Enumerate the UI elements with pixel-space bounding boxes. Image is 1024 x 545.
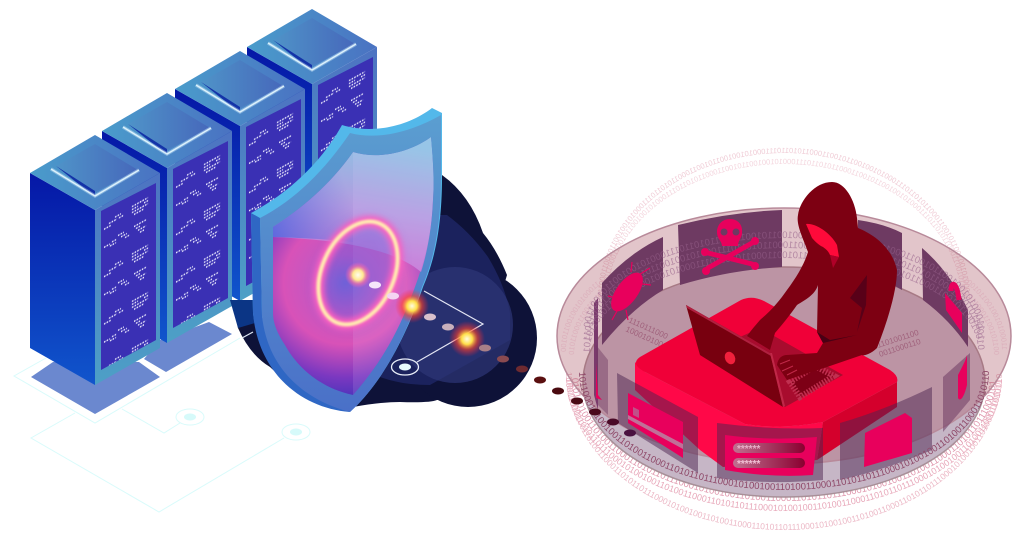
- attack trail glowing points: [345, 262, 485, 357]
- lower disc: [583, 267, 985, 497]
- network node: [392, 359, 418, 375]
- data panel: front right, documents: [840, 387, 932, 480]
- hacker fingers: [780, 360, 797, 375]
- hacker figure: [747, 182, 897, 380]
- server floor tiles: [31, 322, 232, 414]
- network lines: [417, 291, 483, 362]
- glowing ring: [303, 209, 413, 337]
- icon: bug: [606, 262, 651, 320]
- icon: padlock: [945, 284, 962, 333]
- server rack 2: [102, 93, 232, 343]
- hacker body shadow: [850, 275, 867, 332]
- server rack 4: [247, 9, 377, 259]
- data panel: front left, card: [617, 373, 698, 473]
- dark network cloud behind shield: [230, 175, 537, 407]
- binary rings below the disc: 11000101001001101001100011010110111000101001001101001100011010110111000101001001101001100011010110111000101001001101001100011010110111000101: [566, 372, 1002, 530]
- binary printed on disc floor: 1110111000: [627, 316, 670, 341]
- laptop base and keyboard: [700, 328, 843, 407]
- circuit lines on floor: [14, 338, 310, 512]
- binary on disc sides: 001101001100011010110: [954, 281, 999, 354]
- binary printed on disc floor: 0011000110: [878, 337, 922, 359]
- data panel: far right: [943, 353, 970, 432]
- server rack 3: [175, 51, 305, 301]
- icon: login form: [725, 435, 817, 476]
- binary ring top (back): 100110100110001101011011100010100100110100110001101011011100010100100110100110001101011011100010100100110100110001101011: [604, 158, 966, 298]
- laptop screen: [686, 305, 785, 407]
- icon: skull and crossbones: [701, 219, 759, 275]
- binary rings below the disc: 1001100011010110111000101001001101001100011010110111000101001001101001100011010110111000101001001101001100011010110111000101: [566, 378, 1002, 512]
- upper translucent disc: [557, 208, 1011, 464]
- binary ring top (back): 110001010010011010011000110101101110001010010011010011000110101101110001010010011010011000110101101110001010010011010011000110: [598, 148, 970, 300]
- binary printed on disc floor: 1000101000: [624, 325, 669, 351]
- binary on disc sides: 110001010010011010011: [962, 276, 1007, 350]
- icon: credit card: [628, 393, 683, 458]
- attack trail dots: [369, 282, 636, 436]
- icon: documents: [864, 413, 912, 467]
- hacker face: [806, 224, 839, 257]
- binary printed on disc floor: [624, 316, 922, 359]
- server rack 1: [30, 135, 160, 385]
- laptop logo: [723, 350, 737, 366]
- shield: [251, 108, 442, 412]
- data panel: front centre, login: [717, 423, 823, 482]
- hacker waist shadow: [817, 332, 857, 343]
- data panel: far left: [596, 345, 608, 415]
- desk: [635, 298, 897, 467]
- threat panels at the back: [594, 210, 968, 410]
- binary ring over the lower disc edge: 1011000101001001101001100011010110111000101001001101001100011010110111000101001001101001100011010110111000101001001: [579, 371, 989, 490]
- binary rings below the disc: 0101001001101001100011010110111000101001001101001100011010110111000101001001101001100011010110111000101001001101001100011: [572, 378, 996, 502]
- binary on disc sides: [560, 276, 1007, 354]
- icon: login form: ******: [737, 459, 760, 470]
- icon: login form: ******: [737, 444, 760, 455]
- binary printed on disc floor: 1101001100: [876, 328, 920, 350]
